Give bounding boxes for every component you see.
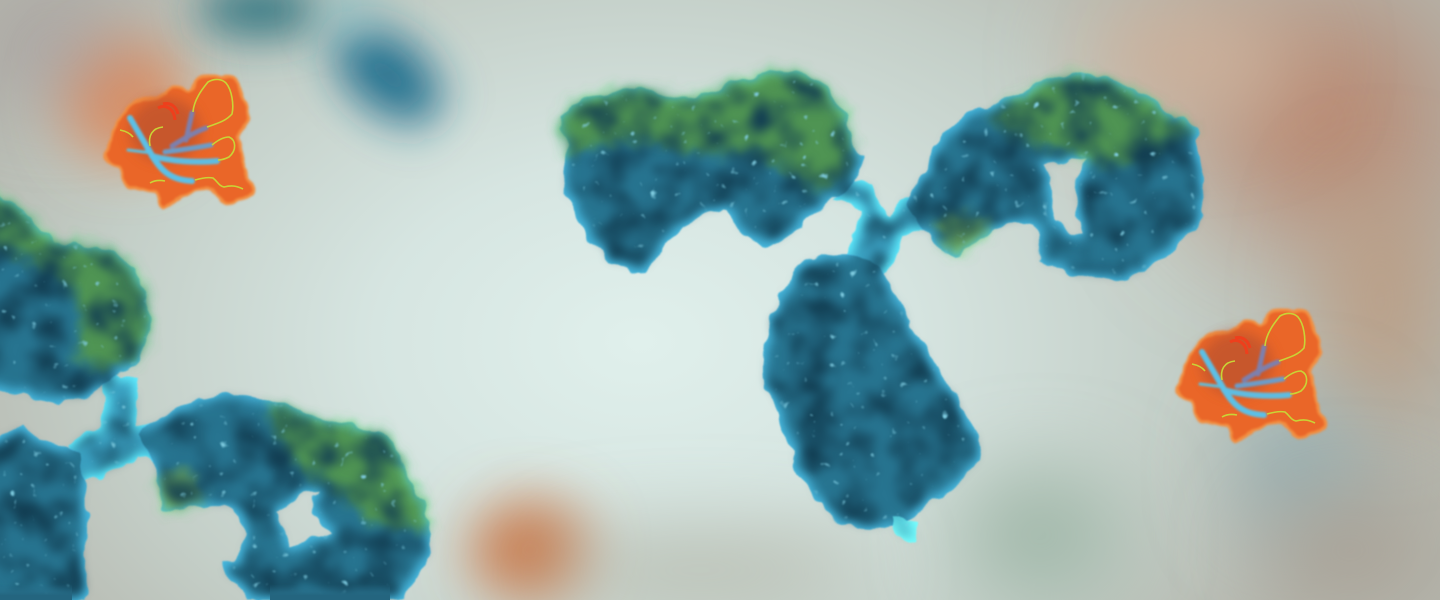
hinge xyxy=(830,175,935,278)
stem tail xyxy=(893,515,917,540)
antigen shaded core xyxy=(129,98,201,162)
left arm xyxy=(560,71,866,272)
beta strands xyxy=(128,113,217,181)
coil lines xyxy=(1192,313,1315,423)
coil lines xyxy=(120,79,243,189)
antigen: upper left xyxy=(105,76,252,208)
bottom edge shading on cropped antibody xyxy=(0,584,390,600)
antigen: right xyxy=(1177,310,1324,442)
lower stem xyxy=(0,425,87,600)
lower-right arm xyxy=(140,393,430,600)
upper arm xyxy=(0,188,149,405)
beta strands xyxy=(1200,347,1289,415)
antigen shaded core xyxy=(1201,332,1273,396)
antigen surface xyxy=(1177,310,1324,442)
antibody: lower left xyxy=(0,188,430,600)
antigen surface xyxy=(105,76,252,208)
hinge xyxy=(68,378,160,482)
stem xyxy=(764,255,981,530)
antibody: main centre-right xyxy=(560,71,1205,540)
right arm xyxy=(910,72,1205,282)
